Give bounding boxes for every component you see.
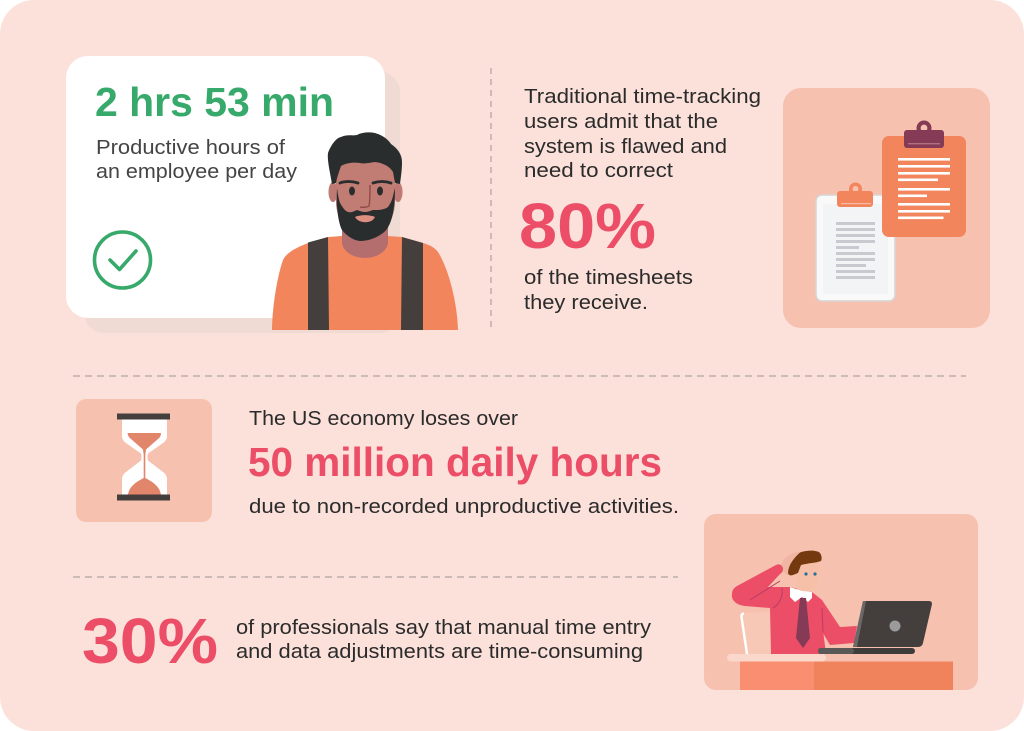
eyes [349, 186, 355, 196]
text: professionals manual time entry: and data adjustments are time-consuming [236, 640, 643, 663]
text: of the timesheets: of the timesheets [524, 266, 693, 289]
text: productive hours description: an employee per day [96, 160, 298, 183]
face [336, 160, 395, 240]
text block: traditional time-tracking users [524, 85, 761, 182]
stat: 80%: 80% [519, 190, 656, 262]
brows [340, 182, 391, 183]
collar [790, 587, 812, 602]
heading: 2 hrs 53 min: 2 hrs 53 min [95, 79, 334, 125]
face and neck [797, 560, 818, 593]
text: productive hours description: Productive hours of [96, 136, 285, 159]
text: professionals manual time entry [236, 616, 652, 663]
stat: 30%: 30% [82, 605, 218, 677]
illustration: man [732, 551, 857, 654]
card shadow [84, 72, 400, 333]
text: non-recorded activities: due to non-recorded unproductive activities. [249, 495, 679, 518]
stat: 50 million daily hours: 50 million daily hours [248, 439, 662, 485]
sleeve creases [750, 581, 823, 632]
ears [328, 182, 338, 202]
icon: orange clipboard [882, 120, 966, 237]
suspenders [308, 237, 329, 330]
icon: hourglass [117, 414, 170, 500]
white card [66, 56, 385, 318]
sweater and arms [732, 564, 857, 654]
text: professionals manual time entry: of professionals say that manual time entry [236, 616, 652, 639]
hand [781, 552, 800, 575]
text: US economy loses over: The US economy loses over [249, 407, 518, 430]
neck [342, 225, 388, 258]
shirt [272, 236, 458, 330]
panel: productive hours [66, 56, 458, 333]
illustration: laptop [818, 601, 932, 654]
beard [337, 188, 395, 241]
text block: traditional time-tracking users: need to correct [524, 159, 673, 182]
text: productive hours description [96, 136, 298, 183]
illustration: bearded man in orange shirt [272, 132, 458, 330]
tie [796, 598, 810, 648]
text block: traditional time-tracking users: users admit that the [524, 110, 718, 133]
text block: traditional time-tracking users: Traditional time-tracking [524, 85, 761, 108]
text block: traditional time-tracking users: system is flawed and [524, 135, 727, 158]
nose [360, 185, 370, 207]
panel: confused man at laptop illustration [704, 514, 978, 690]
text: of the timesheets: they receive. [524, 291, 648, 314]
mouth [355, 215, 375, 222]
text: of the timesheets [524, 266, 693, 314]
panel: hourglass icon [76, 399, 212, 522]
illustration: chair [741, 612, 775, 654]
icon: green check circle [94, 232, 150, 288]
hair [328, 132, 402, 184]
panel: clipboards illustration [783, 88, 990, 328]
icon: white clipboard [816, 182, 895, 301]
eyes [804, 572, 808, 576]
illustration: desk [727, 654, 953, 690]
hair [788, 551, 822, 575]
